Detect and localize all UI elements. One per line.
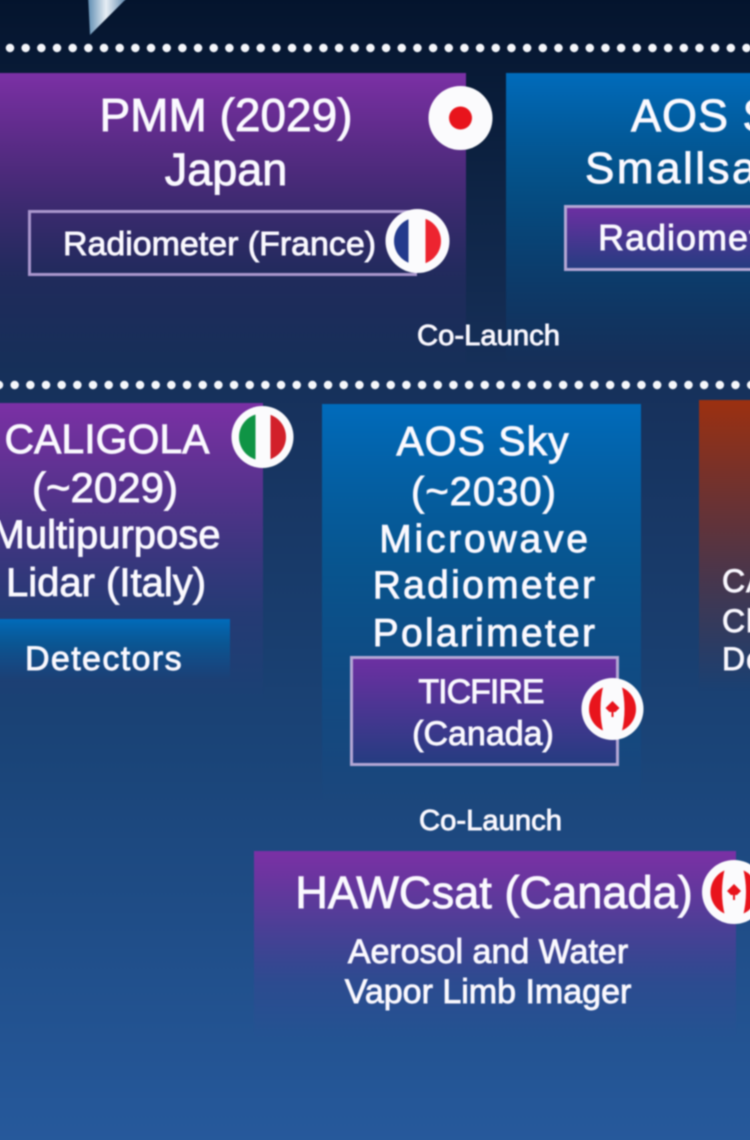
heading: PMM: PMM (2029) xyxy=(99,89,353,141)
text: lidar: Lidar (Italy) xyxy=(6,561,206,605)
text: radiometer: Radiometer xyxy=(373,564,597,607)
box: TICFIRE: (Canada) xyxy=(412,715,554,753)
panel: red mission xyxy=(699,400,750,692)
panel: PMM Japan xyxy=(0,73,466,370)
label: co-launch upper: Co-Launch xyxy=(417,320,560,352)
box: TICFIRE: TICFIRE xyxy=(418,673,544,711)
text: year: (~2030) xyxy=(411,470,557,514)
text: polarimeter: Polarimeter xyxy=(373,612,597,655)
icon: Canada flag xyxy=(582,678,644,740)
heading: AOS Sky: AOS Sky xyxy=(396,418,570,464)
heading: CALIGOLA: CALIGOLA xyxy=(4,416,210,462)
text: aerosol and water: Aerosol and Water xyxy=(348,933,628,971)
text: red panel lines xyxy=(722,563,750,677)
box: radiometer France: Radiometer (France) xyxy=(63,226,376,263)
box: TICFIRE xyxy=(352,658,618,764)
box: detectors xyxy=(0,619,230,681)
icon: Japan flag xyxy=(428,86,492,150)
panel: AOS Sky xyxy=(322,404,641,804)
box: radiometer xyxy=(566,206,750,270)
icon: France flag xyxy=(386,209,450,273)
box: radiometer France xyxy=(30,212,416,274)
heading: HAWCsat: HAWCsat (Canada) xyxy=(295,867,693,918)
panel: AOS Sky Smallsat xyxy=(506,73,750,363)
text: year: (~2029) xyxy=(32,464,178,511)
panel: CALIGOLA xyxy=(0,403,263,703)
text: vapor limb imager: Vapor Limb Imager xyxy=(345,973,631,1011)
panel: HAWCsat xyxy=(254,851,736,1041)
label: co-launch lower: Co-Launch xyxy=(419,805,562,837)
text: microwave: Microwave xyxy=(379,518,591,561)
icon: Canada flag xyxy=(702,860,750,924)
box: detectors: Detectors xyxy=(25,640,183,678)
text: Japan: Japan xyxy=(165,144,287,195)
icon: light beam tip xyxy=(88,0,131,35)
icon: Italy flag xyxy=(232,406,294,468)
